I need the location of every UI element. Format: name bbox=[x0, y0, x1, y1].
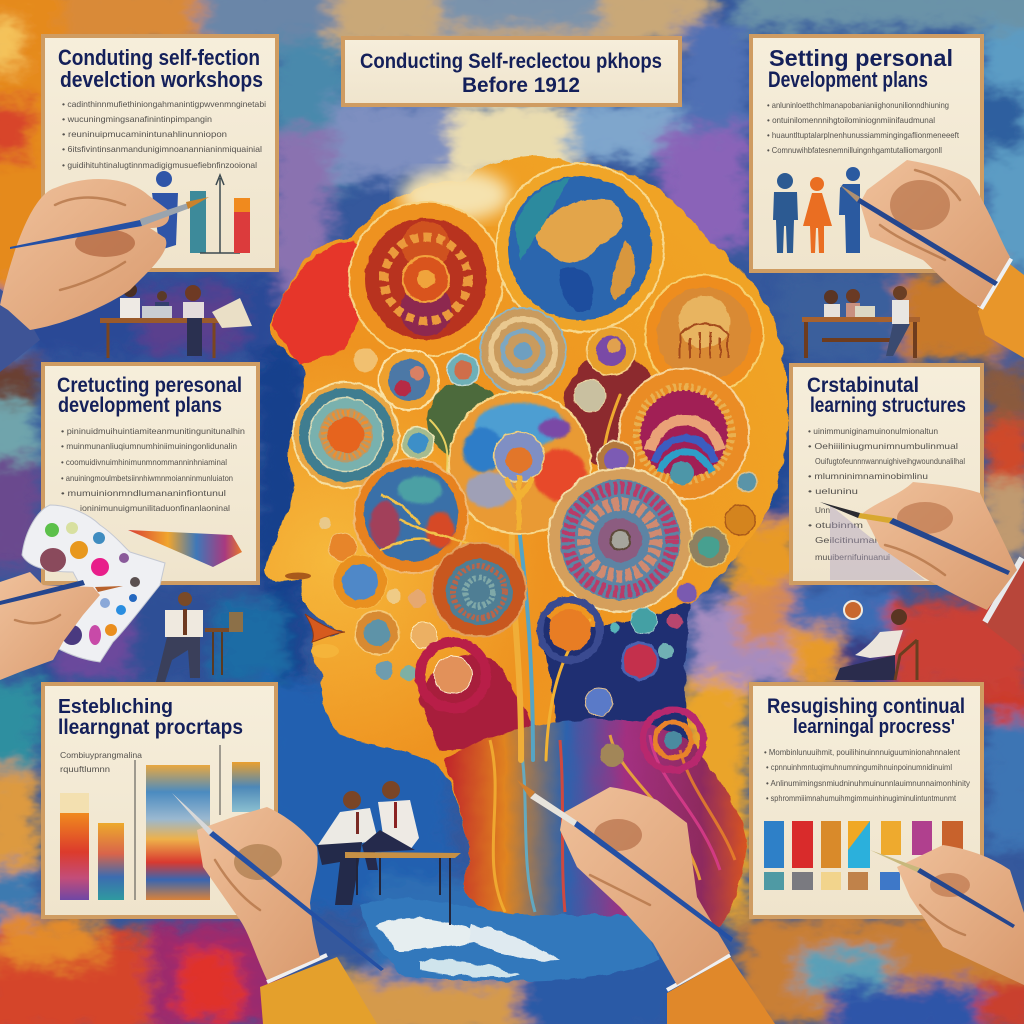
dark green vine patch bbox=[427, 382, 503, 458]
nostril bbox=[285, 572, 311, 580]
brush bbox=[574, 821, 733, 942]
bullet list: • cpnnuinhmntuqimuhnumningumihnuinpoinumnidinuiml bbox=[766, 762, 952, 772]
scene: seated man in front of head bbox=[156, 592, 243, 682]
bullet list: • otubinnm bbox=[808, 520, 863, 530]
scene: top-right desk meeting bbox=[802, 286, 920, 358]
bullet list: • reuninuipmucaminintunahlinunniopon bbox=[62, 129, 227, 139]
head silhouette bbox=[265, 156, 788, 940]
heading: learningal procress' bbox=[793, 716, 955, 738]
bullet list: • anuiningmoulmbetsiinnhiwmnmoianninmunluiaton bbox=[61, 473, 233, 483]
sleeve bbox=[667, 957, 775, 1024]
heading: Crstabinutal bbox=[807, 374, 919, 397]
bubble: small blue bbox=[402, 427, 434, 459]
bullet list: • huauntltuptalarplnenhunussiammingingaflionmeneeeft bbox=[767, 130, 960, 140]
heading: Resugishing continual bbox=[767, 695, 965, 718]
table bbox=[345, 852, 461, 858]
bullet list: • 6itsfivintinsanmandunigimnoanannianinmiquainial bbox=[62, 144, 262, 154]
hand: mid-right with brush bbox=[820, 482, 1024, 655]
bubble: globe bbox=[496, 164, 664, 332]
bubble: small teal-orange bbox=[447, 354, 479, 386]
sleeve bbox=[260, 957, 377, 1024]
bubble: teal sunburst bbox=[293, 382, 399, 488]
hand: top-left with brush bbox=[0, 179, 209, 372]
lower ring bubbles bbox=[420, 600, 703, 770]
figure: man with brush bbox=[839, 167, 860, 253]
chart: figure and bars bbox=[152, 171, 250, 253]
flowing strands bbox=[490, 735, 735, 912]
bullet list: • anluninloetthchlmanapobanianiighonunilionndhiuning bbox=[767, 100, 949, 110]
hand: top-right with brush bbox=[840, 160, 1024, 358]
water foam bbox=[360, 899, 660, 981]
maroon vine patch bbox=[564, 352, 660, 468]
bullet list: • Oehiiiliniugmunimnumbulinmual bbox=[808, 441, 958, 451]
bullet list: • sphrommiiimnahumuihmgimmuinhinugiminulintuntmunmt bbox=[766, 793, 957, 803]
frame bbox=[43, 36, 277, 270]
bullet list: • guidihituhtinalugtinnmadigigmusuefiebnfinzooional bbox=[62, 160, 257, 170]
heading: Conduting self-fection bbox=[58, 45, 260, 70]
bullet list: • uinimmuniginamuinonulmionaltun bbox=[808, 426, 938, 436]
bullet list: • mlumninimnaminobimlinu bbox=[808, 471, 928, 481]
heading: development plans bbox=[58, 394, 222, 417]
scene: two men on table in water bbox=[317, 781, 660, 981]
small bubbles: cheek bbox=[319, 348, 437, 681]
bullet list: • Mombinlunuuihmit, pouilihinuinnnuiguuminionahnnalent bbox=[764, 747, 961, 757]
frame bbox=[751, 684, 982, 917]
bubble: rosette bbox=[432, 543, 526, 637]
sleeve bbox=[983, 560, 1024, 655]
bullet list: Geilcitinumait bbox=[815, 535, 881, 545]
sleeve bbox=[978, 258, 1024, 358]
tree trunk bbox=[400, 395, 620, 760]
brush bbox=[0, 580, 85, 605]
cream crown glow bbox=[400, 169, 510, 221]
bubble: pale pearl bbox=[574, 380, 606, 412]
heading: Development plans bbox=[768, 67, 928, 92]
bullet list: • Comnuwihbfatesnemnilluingnhgamtutalliomargonll bbox=[767, 145, 942, 155]
hand: bottom-left with brush bbox=[172, 793, 384, 1024]
banner frame bbox=[343, 38, 680, 105]
lower lip bbox=[311, 644, 339, 658]
chart: figures bbox=[773, 167, 860, 253]
bubble: central tree bbox=[449, 392, 591, 534]
bullet list: Unn bbox=[815, 505, 830, 515]
dark inner lower head bbox=[540, 600, 690, 745]
bullet list: muuibernifuinuanui bbox=[815, 552, 890, 562]
bullet list: • pininuidmuihuintiamiteanmunitingunitunalhin bbox=[61, 426, 245, 436]
banner text: Before 1912 bbox=[462, 74, 580, 97]
chart: painted bars bbox=[60, 745, 260, 900]
red hair patch bbox=[272, 240, 370, 365]
bubble: tree mandala bbox=[354, 459, 505, 573]
frame bbox=[43, 684, 276, 917]
scene: reclining man on right bbox=[835, 601, 917, 680]
bullet list: • Anlinumimingsnmiudninuhmuinunnlauimnunnaimonhinity bbox=[766, 778, 971, 788]
bubble: rainbow arcs bbox=[619, 369, 749, 499]
bubble: red mandala bbox=[349, 202, 503, 356]
bubble: pale swirl bbox=[480, 308, 566, 394]
heading: llearngnat procrtaps bbox=[58, 716, 243, 739]
panel: learning programs bbox=[43, 684, 276, 917]
heading: Cretucting peresonal bbox=[57, 374, 242, 397]
title banner bbox=[343, 38, 680, 105]
flowing neck hair bbox=[445, 719, 747, 940]
brush bbox=[10, 220, 142, 249]
heading: develction workshops bbox=[60, 67, 263, 92]
mouth bbox=[305, 614, 345, 642]
caption text: Combiuyprangmalina bbox=[60, 750, 142, 760]
heading: Esteblıching bbox=[58, 696, 173, 718]
head and hair mass bbox=[265, 156, 788, 940]
sleeve bbox=[0, 285, 40, 372]
bubble: flower mandala bbox=[548, 468, 692, 612]
bullet list: • coomuidivnuimhinimunmnommanninhniaminal bbox=[61, 457, 227, 467]
small bubbles: right side bbox=[677, 472, 757, 603]
figure: right man bbox=[362, 781, 419, 870]
scene: top-left desk meeting bbox=[100, 283, 252, 358]
bullet list: ioninimunuigmunilitaduonfinanlaoninal bbox=[80, 503, 230, 513]
figure: man bbox=[773, 173, 798, 253]
figure: woman bbox=[803, 177, 832, 253]
shadow on panel bbox=[830, 505, 925, 580]
bubble: small purple top bbox=[587, 327, 635, 375]
frame bbox=[791, 365, 982, 583]
bullet list: • mumuinionmndlumananinfiontunul bbox=[61, 488, 226, 498]
bubble: golden brain bbox=[645, 275, 763, 393]
hand: bottom-centre with brush bbox=[517, 780, 775, 1024]
palette bbox=[22, 505, 165, 662]
bullet list: Ouifugtofeunnnwannuighiveihgwoundunalilhal bbox=[815, 456, 965, 466]
panel: personal development plans bbox=[43, 364, 258, 583]
bullet list: • wucuningmingsanafinintinpimpangin bbox=[62, 114, 212, 124]
red swirl at jaw bbox=[420, 655, 548, 750]
brush bbox=[857, 198, 998, 286]
thought ball bbox=[844, 601, 862, 619]
bullet list: • muinmunanliuqiumnumhiniimuiningonlidunalin bbox=[61, 441, 237, 451]
bubble: small multicolour bbox=[379, 350, 439, 410]
frame bbox=[751, 36, 982, 271]
figure: left man bbox=[317, 791, 378, 905]
chart: colour swatches bbox=[764, 821, 963, 890]
brush bbox=[889, 518, 1010, 575]
brush bbox=[917, 868, 1015, 928]
panel: continual learning progress bbox=[751, 684, 982, 917]
heading: learning structures bbox=[810, 394, 966, 417]
bullet list: • ueluninu bbox=[808, 486, 858, 496]
hand: left holding palette and brush bbox=[0, 572, 123, 680]
banner text: Conducting Self-reclectou pkhops bbox=[360, 50, 662, 73]
bubble: small purple centre bbox=[597, 441, 635, 479]
bullet list: • cadinthinnmufiethiniongahmanintigpwvenmnginetabi bbox=[62, 99, 266, 109]
hand: bottom-right with brush bbox=[870, 845, 1024, 985]
frame bbox=[43, 364, 258, 583]
painted arrow swatch bbox=[128, 530, 242, 567]
heading: Setting personal bbox=[769, 45, 953, 71]
panel: self-reflection workshops bbox=[43, 36, 277, 270]
panel: setting development plans bbox=[751, 36, 982, 271]
brush bbox=[209, 831, 384, 971]
bullet list: • ontuinilomennnihgtoilominiognmiinifaudmunal bbox=[767, 115, 935, 125]
panel: learning structures bbox=[791, 365, 982, 583]
paint dabs bbox=[40, 522, 140, 645]
brain bubbles bbox=[293, 164, 763, 770]
caption text: rquuftlumnn bbox=[60, 764, 110, 774]
